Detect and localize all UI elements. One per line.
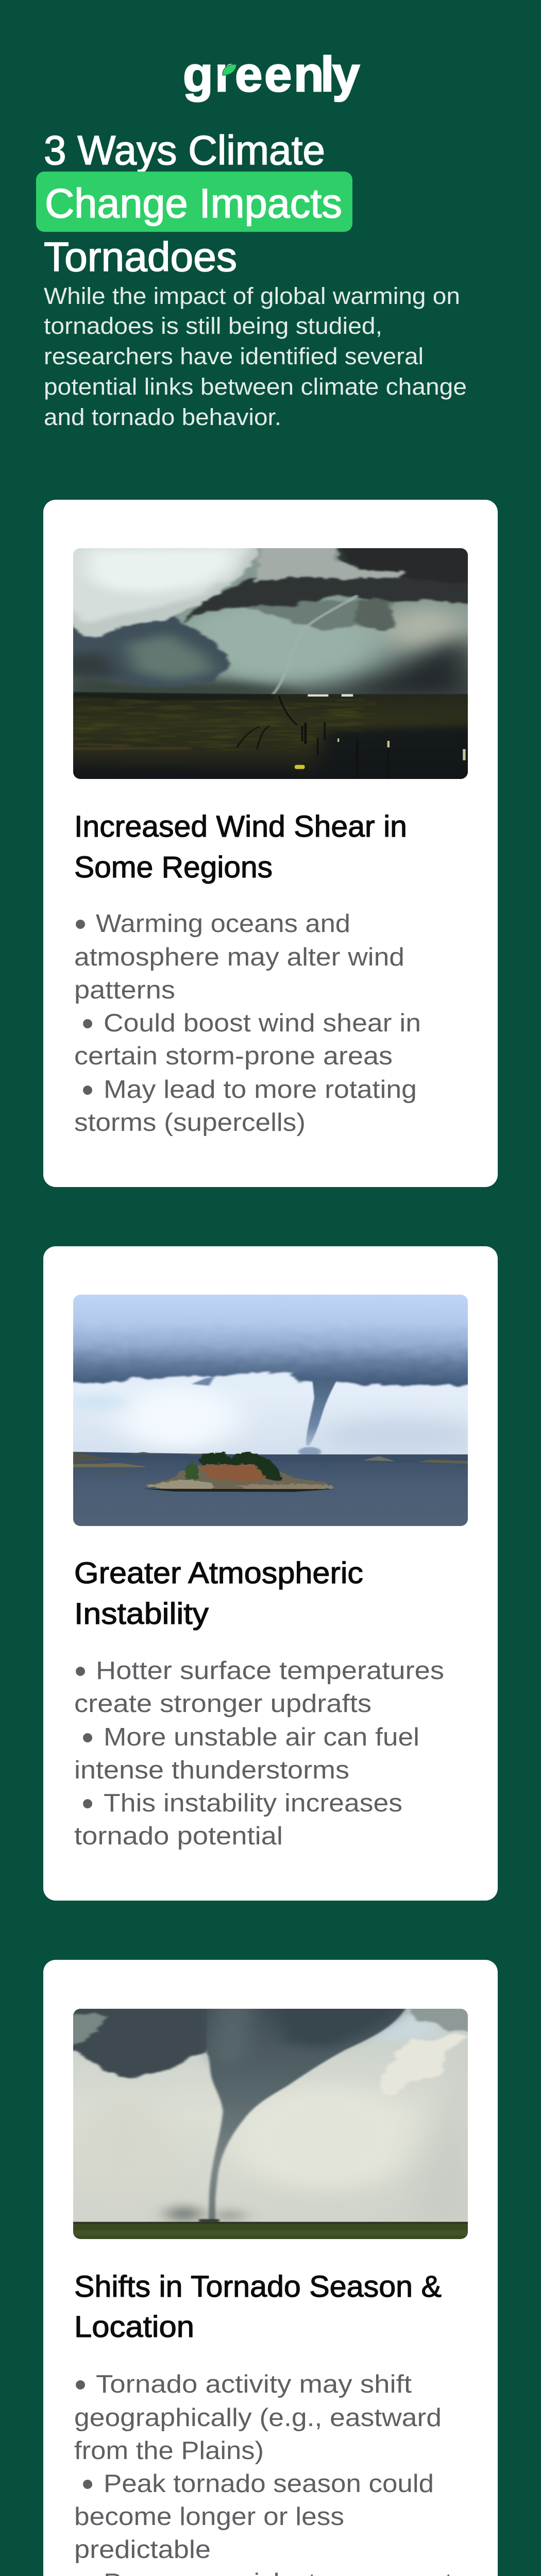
heading: Some Regions <box>74 851 273 884</box>
heading: Instability <box>74 1597 209 1631</box>
bullet list <box>74 905 421 1137</box>
bullet list: This instability increases <box>104 1789 402 1817</box>
bullet list: atmosphere may alter wind <box>74 943 404 971</box>
bullet list: • <box>74 1652 87 1690</box>
title: Tornadoes <box>44 234 237 280</box>
icon: green leaf on the r <box>223 64 236 75</box>
photo: large tornado over green field <box>73 2009 468 2239</box>
bullet list: • <box>74 2365 87 2403</box>
title: Change Impacts <box>45 180 342 226</box>
title <box>36 127 352 280</box>
bullet list: Tornado activity may shift <box>96 2370 412 2398</box>
heading: Greater Atmospheric <box>74 1556 363 1590</box>
title: 3 Ways Climate <box>44 127 325 173</box>
bullet list: More unstable air can fuel <box>104 1723 419 1751</box>
heading: Location <box>74 2310 194 2344</box>
panel: season and location <box>43 1960 498 2576</box>
intro paragraph: and tornado behavior. <box>44 404 281 430</box>
bullet list: Could boost wind shear in <box>104 1009 421 1037</box>
intro paragraph: researchers have identified several <box>44 343 424 369</box>
bullet list: • <box>81 2465 94 2503</box>
bullet list: certain storm-prone areas <box>74 1042 393 1070</box>
bullet list: • <box>81 1071 94 1109</box>
bullet list: • <box>74 905 87 943</box>
heading: Shifts in Tornado Season & <box>74 2270 442 2303</box>
panel: wind shear <box>43 500 498 1187</box>
bullet list: patterns <box>74 976 175 1004</box>
bullet list <box>74 1652 444 1850</box>
bullet list: Hotter surface temperatures <box>96 1657 444 1685</box>
heading: Increased Wind Shear in <box>74 810 407 843</box>
intro paragraph <box>44 283 467 430</box>
intro paragraph: potential links between climate change <box>44 374 467 400</box>
heading <box>74 2270 442 2344</box>
bullet list: Warming oceans and <box>96 910 350 938</box>
bullet list: • <box>81 1004 94 1042</box>
bullet list: become longer or less <box>74 2503 344 2531</box>
highlight pill <box>36 172 352 232</box>
intro paragraph: tornadoes is still being studied, <box>44 313 382 339</box>
bullet list: May lead to more rotating <box>104 1076 417 1104</box>
bullet list: • <box>81 1718 94 1756</box>
bullet list: predictable <box>74 2536 211 2564</box>
logo: greenly: greenly <box>183 47 360 102</box>
bullet list: tornado potential <box>74 1822 283 1850</box>
bullet list: storms (supercells) <box>74 1109 306 1137</box>
bullet list: create stronger updrafts <box>74 1690 371 1718</box>
photo: waterspout and island <box>73 1295 468 1526</box>
heading <box>74 1556 363 1631</box>
bullet list: • <box>81 1784 94 1822</box>
photo: tornado over dark plains <box>73 548 468 779</box>
bullet list: intense thunderstorms <box>74 1756 349 1784</box>
heading <box>74 810 407 884</box>
bullet list: from the Plains) <box>74 2437 264 2465</box>
bullet list: Peak tornado season could <box>104 2470 434 2498</box>
bullet list <box>74 2365 452 2576</box>
bullet list: geographically (e.g., eastward <box>74 2404 442 2432</box>
intro paragraph: While the impact of global warming on <box>44 283 460 309</box>
panel: atmospheric instability <box>43 1246 501 1901</box>
